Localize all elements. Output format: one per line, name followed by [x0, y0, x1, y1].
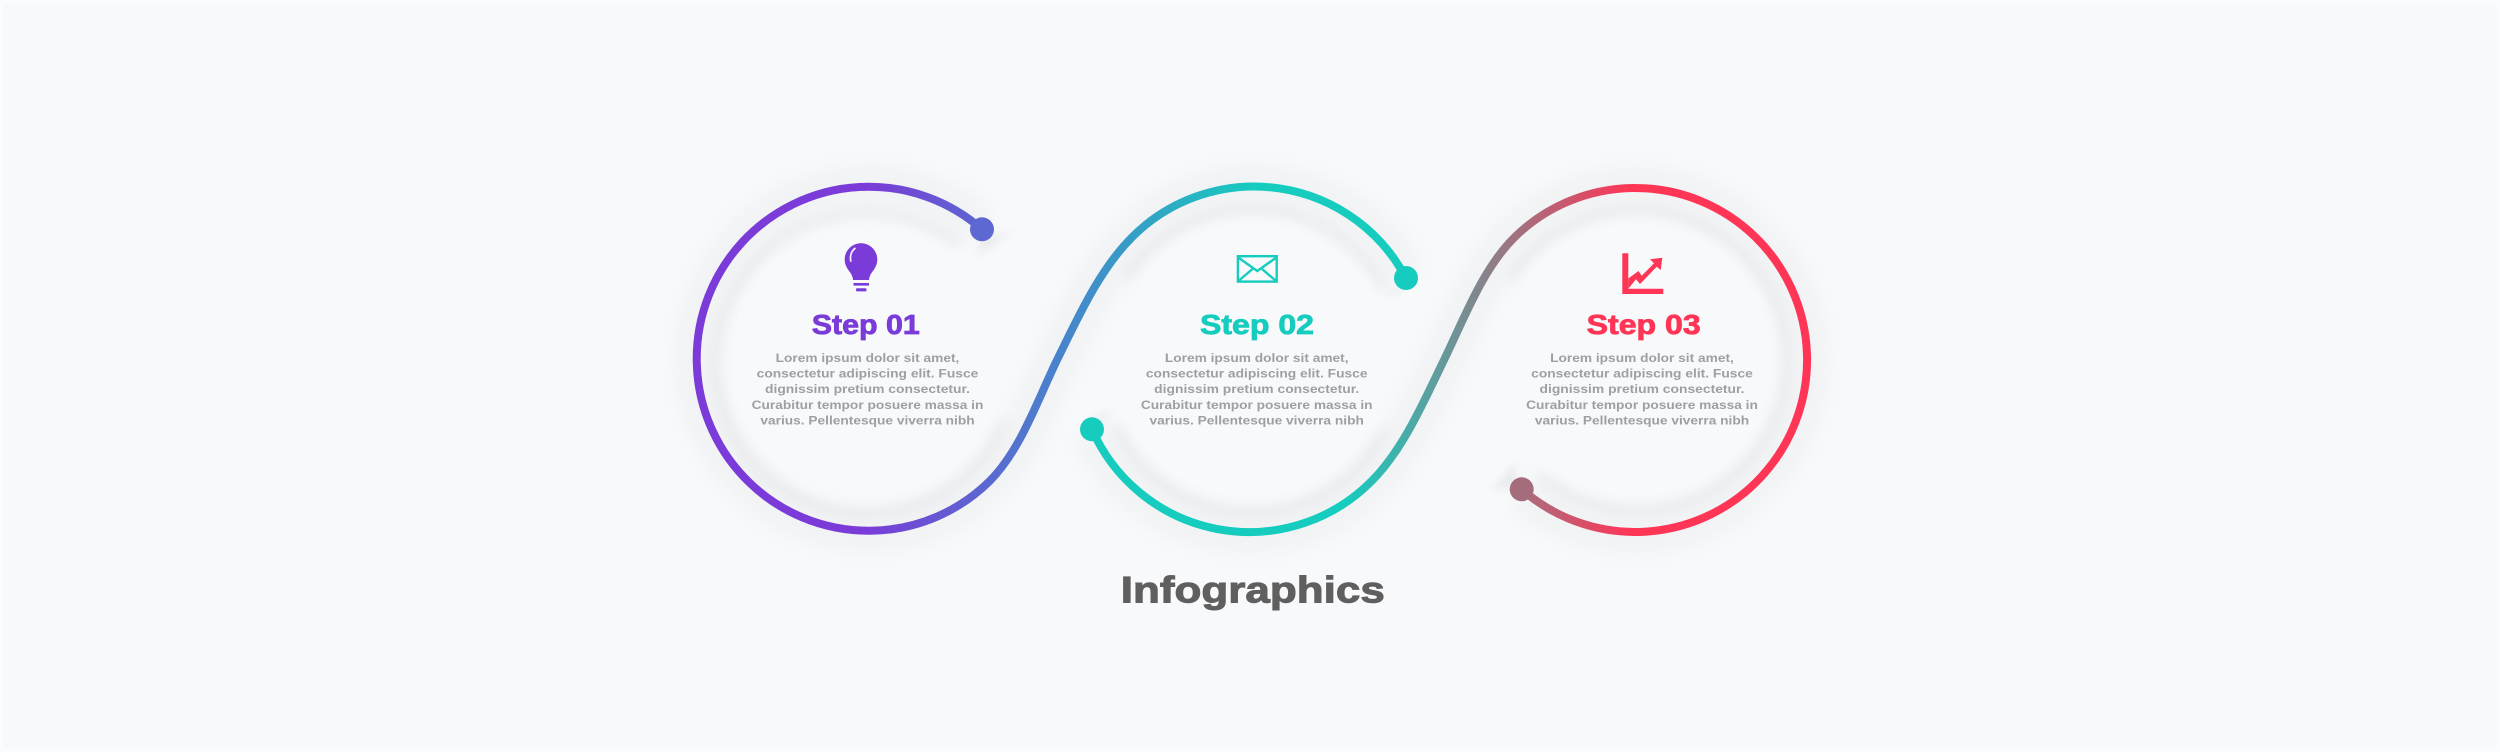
panel: step 02	[1141, 256, 1373, 427]
panel: step 03	[1526, 253, 1758, 427]
text block: step 02: consectetur adipiscing elit. Fusce	[1146, 368, 1368, 380]
text block: step 01: varius. Pellentesque viverra nibh	[760, 414, 975, 427]
line: step 02 bottom arc flowing into step 03 circle	[1092, 188, 1807, 532]
text block: step 02	[1141, 352, 1373, 427]
line: step 01 circle flowing into step 02 top arc	[697, 187, 1406, 531]
soft shadows behind the line	[697, 187, 1807, 532]
text block: step 01: consectetur adipiscing elit. Fusce	[757, 368, 979, 380]
text block: step 02: Curabitur tempor posuere massa in	[1141, 399, 1373, 412]
text block: step 03: dignissim pretium consectetur.	[1540, 383, 1744, 396]
text block: step 03: Lorem ipsum dolor sit amet,	[1550, 352, 1734, 365]
heading: step 02: Step 02	[1200, 309, 1314, 340]
dot: step 02 bottom arc start	[1080, 417, 1104, 441]
panel: step 01	[752, 243, 983, 427]
heading: step 01: Step 01	[812, 309, 920, 340]
icon: envelope	[1238, 256, 1277, 282]
dot: step 03 line end	[1510, 477, 1534, 501]
title: Infographics	[1121, 570, 1385, 611]
dot: step 01 line end	[970, 217, 994, 241]
text block: step 03: Curabitur tempor posuere massa in	[1526, 399, 1758, 412]
text block: step 03: varius. Pellentesque viverra nibh	[1535, 414, 1749, 427]
text block: step 03	[1526, 352, 1758, 427]
icon: light bulb	[845, 243, 877, 291]
text block: step 01: Curabitur tempor posuere massa in	[752, 399, 983, 412]
text block: step 02: dignissim pretium consectetur.	[1154, 383, 1359, 396]
text block: step 01: Lorem ipsum dolor sit amet,	[776, 352, 959, 365]
text block: step 01: dignissim pretium consectetur.	[765, 383, 970, 396]
text block: step 02: Lorem ipsum dolor sit amet,	[1165, 352, 1349, 365]
text block: step 03: consectetur adipiscing elit. Fusce	[1531, 368, 1753, 380]
heading: step 03: Step 03	[1587, 309, 1701, 340]
icon: rising chart	[1622, 253, 1663, 294]
dot: step 02 top arc end	[1394, 266, 1418, 290]
text block: step 01	[752, 352, 983, 427]
text block: step 02: varius. Pellentesque viverra nibh	[1150, 414, 1364, 427]
